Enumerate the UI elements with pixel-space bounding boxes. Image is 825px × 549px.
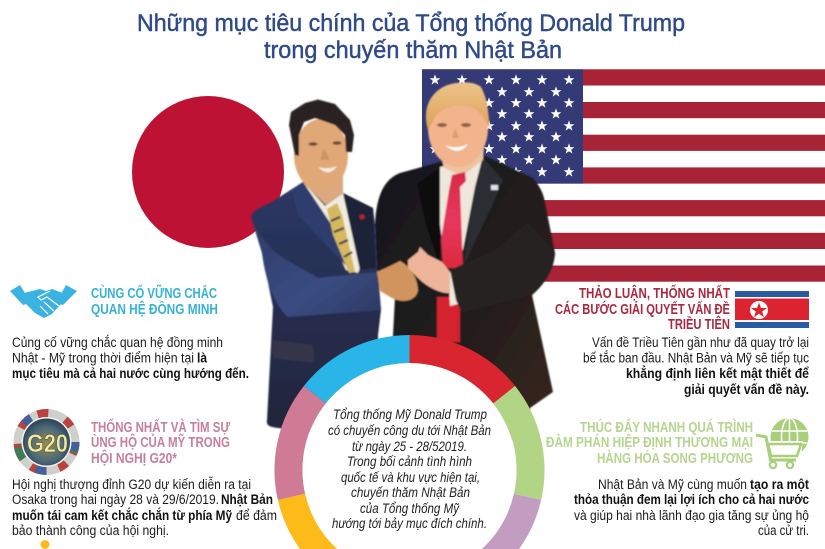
clasped hands [377, 247, 450, 301]
heading: G20 [91, 418, 231, 467]
Abe pocket [272, 340, 314, 363]
text: alliance: Củng cố vững chắc quan hệ đồng minh [12, 335, 223, 350]
text: G20: Osaka trong hai ngày 28 và 29/6/2019. [12, 492, 219, 507]
text: North Korea [583, 335, 809, 397]
Trump face [428, 89, 488, 167]
text: G20: Hội nghị thượng đỉnh G20 dự kiến diễn ra tại [12, 477, 251, 492]
text: trade: của cử tri. [758, 523, 809, 538]
Trump hair [426, 82, 490, 130]
text: alliance [12, 335, 249, 381]
flag pin [491, 185, 498, 190]
text: North Korea: giải quyết vấn đề này. [684, 382, 809, 397]
central text block: Trong bối cảnh tình hình [347, 454, 472, 469]
central text block: chuyến thăm Nhật Bản [351, 485, 470, 500]
American flag [422, 69, 825, 282]
photo: two leaders shaking hands [251, 82, 555, 440]
Abe sleeve [252, 220, 381, 317]
Abe face [294, 119, 348, 191]
heading: trade: HÀNG HÓA SONG PHƯƠNG [597, 449, 753, 467]
heading: North Korea: TRIỀU TIÊN [668, 315, 730, 333]
central text block: từ ngày 25 - 28/52019. [352, 439, 467, 454]
Abe hair [289, 100, 354, 156]
yellow dot [40, 540, 50, 549]
text: G20 [12, 477, 277, 538]
Abe figure [251, 100, 381, 440]
icon: handshake [10, 285, 77, 318]
central text block: hướng tới bảy mục đích chính. [332, 516, 487, 531]
Trump smile [445, 144, 468, 151]
Abe tie [327, 203, 355, 273]
text: trade: tạo ra một [750, 477, 809, 492]
text: North Korea: khẳng định liên kết mật thiết để [626, 366, 809, 381]
heading: trade: THÚC ĐẨY NHANH QUÁ TRÌNH [580, 418, 753, 436]
text: alliance: Nhật - Mỹ trong thời điểm hiện tại [12, 350, 194, 366]
central text block: Tổng thống Mỹ Donald Trump [333, 407, 487, 422]
icon: globe shopping cart [756, 418, 808, 468]
text: alliance: là [197, 350, 207, 366]
heading: trade: ĐÀM PHÁN HIỆP ĐỊNH THƯƠNG MẠI [546, 433, 753, 451]
Trump sleeve [450, 222, 555, 313]
text: G20: bảo thành công của hội nghị. [12, 523, 169, 538]
text: trade: Nhật Bản và Mỹ cùng muốn [598, 477, 747, 492]
title: trong chuyến thăm Nhật Bản [264, 37, 562, 64]
central text block: quốc tế và khu vực hiện tại, [341, 470, 480, 485]
text: alliance: mục tiêu mà cả hai nước cùng hướng đến. [12, 366, 249, 381]
Abe neck [304, 165, 343, 205]
icon: G20 globe badge: G20 [27, 430, 68, 458]
heading: North Korea: THẢO LUẬN, THỐNG NHẤT [579, 284, 730, 302]
central ring of seven coloured segments [278, 349, 541, 549]
central text block: của Tổng thống Mỹ [360, 501, 460, 516]
heading: alliance: CÙNG CỐ VỮNG CHẮC [91, 284, 217, 302]
text: G20: để đảm [236, 508, 277, 523]
heading: G20: THỐNG NHẤT VÀ TÌM SỰ [91, 418, 231, 436]
text: trade [574, 477, 809, 538]
heading: G20: HỘI NGHỊ G20* [91, 449, 177, 467]
icon: North Korean flag [735, 291, 809, 328]
central text block: có chuyến công du tới Nhật Bản [328, 423, 491, 438]
heading: alliance [91, 284, 218, 318]
white centre circle [302, 363, 516, 549]
icon: G20 globe badge [14, 409, 80, 475]
heading: G20: ÙNG HỘ CỦA MỸ TRONG [91, 433, 230, 451]
Trump figure [375, 82, 555, 440]
title: Những mục tiêu chính của Tổng thống Donald Trump [137, 10, 685, 37]
text: G20: muốn tái cam kết chắc chắn từ phía Mỹ [12, 508, 232, 523]
heading: alliance: QUAN HỆ ĐỒNG MINH [91, 300, 218, 318]
Trump cuff [448, 270, 458, 306]
Trump neck [440, 146, 484, 176]
central text block [328, 407, 491, 531]
heading: North Korea: CÁC BƯỚC GIẢI QUYẾT VẤN ĐỀ [555, 300, 730, 318]
heading: North Korea [555, 284, 730, 333]
Japanese flag circle [132, 96, 284, 248]
title [137, 10, 685, 64]
text: G20: Nhật Bản [221, 492, 273, 507]
Trump tie [441, 172, 466, 268]
heading: trade [546, 418, 753, 467]
Abe smile [318, 166, 337, 172]
